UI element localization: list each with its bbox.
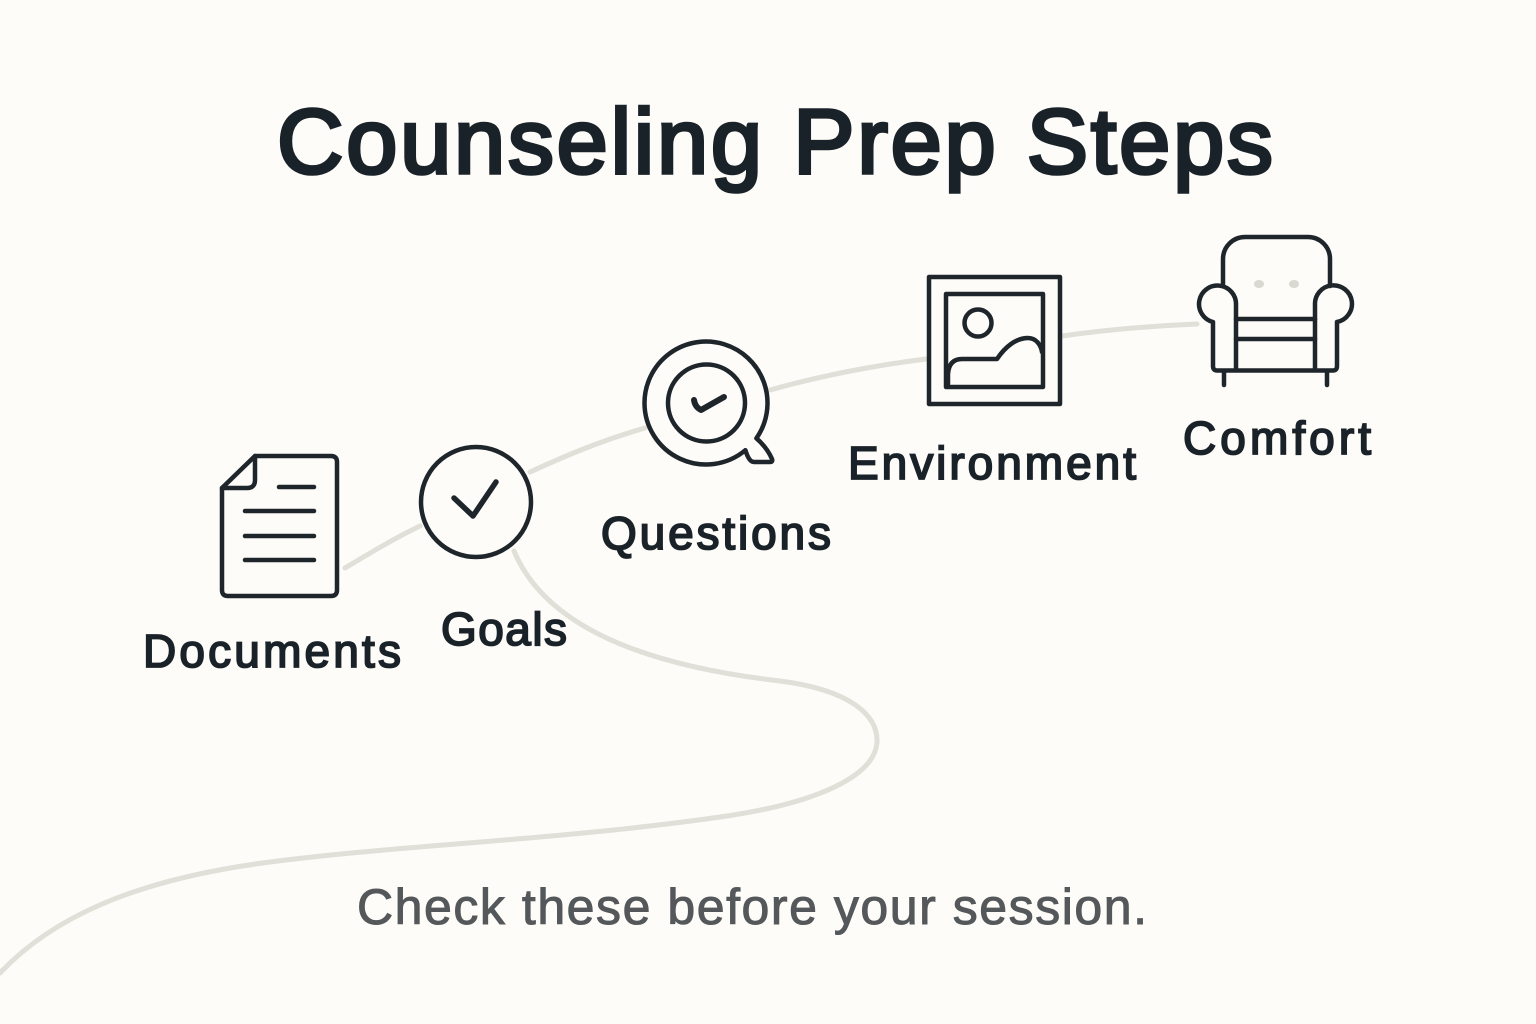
label: Comfort: Comfort bbox=[1183, 412, 1371, 464]
caption: Check these before your session. bbox=[357, 879, 1147, 935]
icon: environment picture frame bbox=[929, 277, 1060, 404]
icon: goals check circle bbox=[421, 447, 531, 557]
connecting path: steps bbox=[0, 324, 1197, 973]
icon: questions speech bubble bbox=[644, 342, 772, 464]
label: Goals: Goals bbox=[441, 603, 567, 655]
label: Documents: Documents bbox=[143, 625, 401, 677]
title: Counseling Prep Steps bbox=[277, 91, 1273, 193]
label: Environment: Environment bbox=[848, 437, 1136, 489]
label: Questions: Questions bbox=[601, 507, 831, 559]
icon: comfort armchair bbox=[1199, 237, 1352, 385]
icon: document bbox=[222, 456, 337, 596]
